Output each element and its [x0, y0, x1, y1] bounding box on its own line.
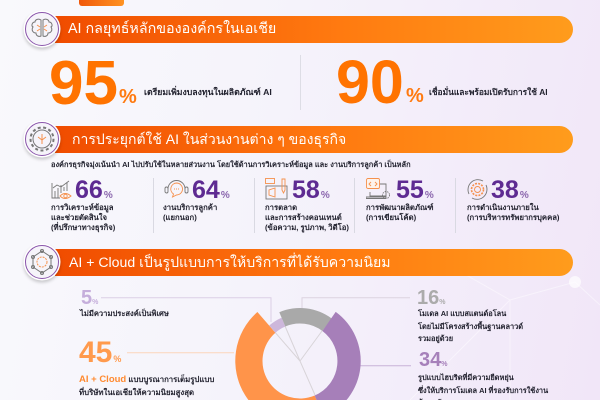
stat 95 percent: 95 — [49, 49, 118, 118]
metric 58 percent: 58% — [292, 176, 330, 204]
label 34 percent: รูปแบบไฮบริดที่มีความยืดหยุ่น — [418, 373, 514, 382]
section 2 header — [22, 122, 573, 161]
metric 66 percent: (ที่ปรึกษาทางธุรกิจ) — [51, 223, 115, 232]
label 45 percent — [79, 336, 214, 398]
title: การประยุกต์ใช้ AI ในส่วนงานต่าง ๆ ของธุรกิจ — [72, 131, 346, 147]
label 5 percent: ไม่มีความประสงค์เป็นพิเศษ — [80, 309, 169, 318]
icon: network — [25, 245, 59, 279]
metric 64 percent: (แยกนอก) — [163, 213, 197, 222]
title: AI + Cloud เป็นรูปแบบการให้บริการที่ได้รับความนิยม — [69, 254, 391, 270]
icon: gear cycle — [468, 179, 488, 200]
icon: headset chat — [164, 180, 188, 198]
stat 90 percent — [336, 48, 548, 116]
label 5 percent: 5% — [81, 287, 98, 309]
label 16 percent — [417, 287, 523, 344]
label 16 percent: โดยไม่มีโครงสร้างพื้นฐานคลาวด์ — [418, 322, 523, 331]
label 45 percent: 45% — [79, 336, 121, 369]
metric 38 percent: (การบริหารทรัพยากรบุคคล) — [467, 213, 560, 222]
label 5 percent — [79, 287, 169, 318]
metric 66 percent: 66% — [75, 176, 113, 204]
metric 58 percent: (ข้อความ, รูปภาพ, วิดีโอ) — [265, 223, 349, 232]
metric 64 percent: 64% — [192, 176, 230, 204]
icon: brain — [25, 12, 59, 46]
label 34 percent — [418, 350, 548, 400]
icon: marketing board — [265, 178, 288, 200]
metric 66 percent — [51, 176, 115, 232]
metric 38 percent — [467, 176, 560, 222]
icon: chart eye — [52, 180, 72, 199]
icon: laptop code — [366, 178, 390, 199]
top tab — [79, 0, 124, 6]
stat 95 percent — [49, 49, 272, 118]
stat 90 percent: 90 — [336, 48, 404, 116]
label 16 percent: โมเดล AI แบบสแตนด์อโลน — [418, 309, 506, 318]
stat 90 percent: % — [406, 85, 424, 107]
intro text: องค์กรธุรกิจมุ่งเน้นนำ AI ไปปรับใช้ในหลายส่วนงาน โดยใช้ด้านการวิเคราะห์ข้อมูล และ งานบริการลูกค้า เป็นหลัก — [51, 160, 411, 169]
section 3 header — [22, 245, 573, 284]
metric 38 percent: 38% — [491, 176, 529, 204]
metric 66 percent: การวิเคราะห์ข้อมูล — [51, 203, 113, 212]
section 1 header — [22, 12, 573, 51]
stat 95 percent: เตรียมเพิ่มงบลงทุนในผลิตภัณฑ์ AI — [144, 87, 272, 97]
metric 38 percent: การดำเนินงานภายใน — [467, 203, 539, 212]
label 34 percent: ซึ่งให้บริการโมเดล AI ที่รองรับการใช้งาน — [418, 386, 548, 394]
label 45 percent: ที่บริษัทในเอเชียให้ความนิยมสูงสุด — [79, 388, 194, 397]
metric 55 percent: การพัฒนาผลิตภัณฑ์ — [366, 203, 433, 212]
icon: gear circuit — [25, 122, 59, 156]
metric 58 percent: และการสร้างคอนเทนต์ — [265, 213, 342, 222]
metric 58 percent: การตลาด — [265, 203, 297, 212]
metric 55 percent: (การเขียนโค้ด) — [366, 213, 416, 222]
metric 66 percent: และช่วยตัดสินใจ — [51, 213, 107, 222]
metric 55 percent — [366, 176, 434, 222]
metric 58 percent — [265, 176, 349, 232]
label 16 percent: รวมอยู่ด้วย — [418, 334, 453, 343]
stat 95 percent: % — [119, 86, 137, 108]
stat 90 percent: เชื่อมั่นและพร้อมเปิดรับการใช้ AI — [429, 87, 548, 97]
metric 64 percent — [163, 176, 230, 222]
metric 55 percent: 55% — [396, 176, 434, 204]
label 16 percent: 16% — [417, 287, 445, 309]
donut chart — [101, 297, 411, 400]
title: AI กลยุทธ์หลักขององค์กรในเอเชีย — [68, 21, 276, 37]
metric 64 percent: งานบริการลูกค้า — [163, 203, 217, 212]
label 45 percent: AI + Cloud แบบบูรณาการเต็มรูปแบบ — [79, 374, 214, 385]
